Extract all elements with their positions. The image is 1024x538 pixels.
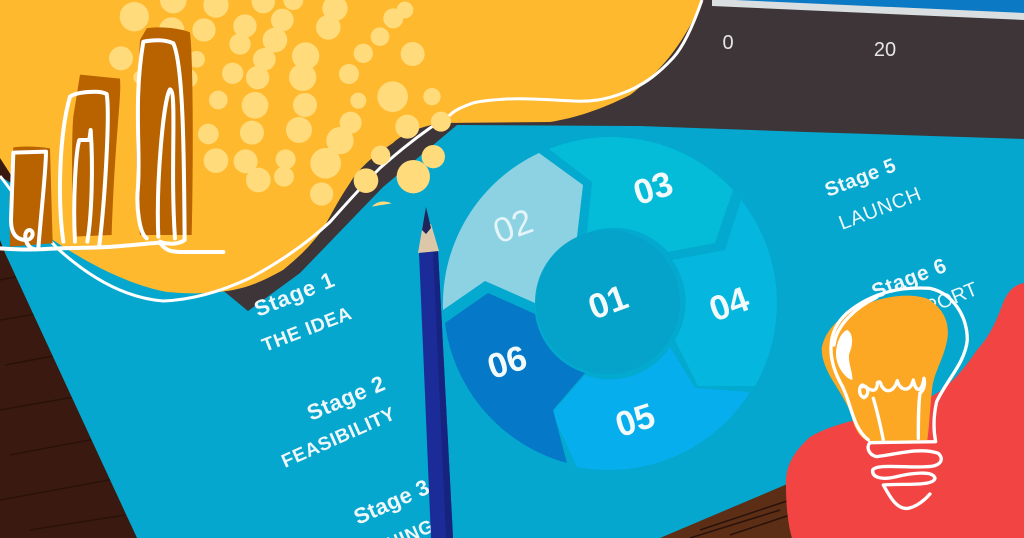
segment numbers (483, 164, 755, 445)
stage 1: Stage 1 (251, 267, 338, 322)
stage 3 (333, 474, 437, 538)
stage 1 (251, 267, 355, 357)
segment 04 (672, 200, 777, 386)
bar chart doodle (0, 27, 223, 252)
segment numbers: 05 (611, 396, 660, 445)
axis labels (722, 32, 896, 61)
segment 03 (549, 137, 733, 252)
stage 3: Stage 3 (350, 474, 433, 530)
bulb white outlines (831, 288, 967, 508)
stage 5 (822, 155, 924, 235)
stage 5: LAUNCH (836, 183, 924, 235)
blue bar on charcoal sheet (712, 0, 1024, 20)
blue paper sheet (0, 125, 1024, 538)
pencil body (419, 250, 453, 538)
segment 02 (443, 153, 583, 310)
pencil lead tip (422, 207, 431, 234)
pencil (418, 207, 453, 538)
stage text labels (251, 155, 981, 538)
pencil wood cone (418, 224, 439, 253)
stage 5: Stage 5 (822, 155, 899, 202)
outer disc (443, 136, 777, 470)
decorative dots (109, 0, 451, 207)
centre circle (536, 230, 680, 374)
white sketched outlines (0, 40, 223, 252)
charcoal paper sheet (0, 0, 1024, 311)
segment numbers: 06 (483, 338, 532, 387)
brown bars (9, 27, 193, 247)
segment numbers: 04 (704, 279, 755, 329)
yellow blob (0, 0, 702, 293)
axis labels: 20 (874, 39, 896, 61)
segment 06 (445, 293, 585, 463)
stage 6: SUPPORT (884, 278, 981, 335)
stage 6: Stage 6 (869, 254, 950, 304)
light bulb icon (822, 288, 967, 508)
bulb highlight (836, 330, 852, 380)
stage 1: THE IDEA (259, 303, 355, 357)
cycle diagram (443, 136, 777, 470)
segment numbers: 03 (629, 164, 678, 213)
bulb orange fill (822, 296, 948, 442)
stage 2: Stage 2 (303, 371, 388, 426)
axis labels: 0 (722, 32, 734, 54)
segment 05 (552, 347, 750, 470)
segment numbers: 01 (583, 277, 633, 327)
segment numbers: 02 (488, 201, 538, 251)
white swoosh line (0, 0, 702, 301)
stage 2: FEASIBILITY (278, 404, 399, 473)
stage 2 (278, 371, 399, 473)
red blob (786, 283, 1024, 538)
stage 6 (869, 254, 981, 335)
